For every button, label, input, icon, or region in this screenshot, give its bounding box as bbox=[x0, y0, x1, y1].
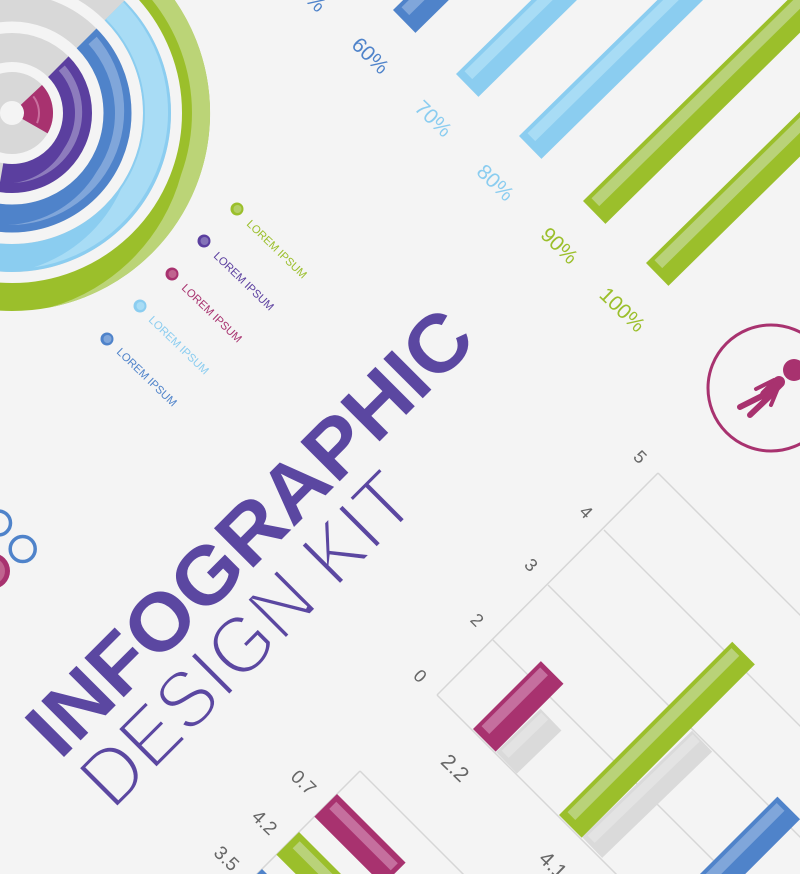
bar: 90% bbox=[583, 0, 800, 224]
green bar bbox=[559, 642, 755, 838]
ring 4: light blue segment bbox=[0, 0, 217, 318]
gray bar: lower bbox=[613, 827, 769, 874]
blue bar bbox=[636, 797, 800, 874]
axis labels: 5 bbox=[629, 446, 651, 468]
bar: 70% bbox=[456, 0, 692, 97]
ring 1: magenta segment bbox=[0, 75, 50, 151]
icon: person in circle bbox=[708, 325, 800, 451]
ring: blue upper bbox=[0, 511, 10, 535]
bar: 100% bbox=[646, 39, 800, 286]
bar: 60% bbox=[393, 0, 629, 33]
legend bbox=[100, 202, 309, 409]
green bar bbox=[276, 832, 377, 874]
value labels: 0.7 bbox=[286, 766, 320, 800]
heading: DESIGN KIT: DESIGN KIT bbox=[62, 454, 433, 825]
axis labels: 2 bbox=[466, 609, 488, 631]
ring: blue lower bbox=[10, 536, 35, 562]
dot: magenta bbox=[0, 553, 10, 589]
grid lines bbox=[437, 473, 800, 874]
axes bbox=[256, 771, 464, 874]
percent bar chart bbox=[284, 0, 800, 337]
magenta bar bbox=[473, 661, 564, 752]
legend item: green: LOREM IPSUM bbox=[244, 218, 309, 281]
blue bar bbox=[254, 869, 276, 874]
legend item: green bbox=[230, 202, 309, 281]
second bar chart bbox=[209, 766, 464, 874]
percent labels: 60% bbox=[347, 33, 393, 79]
ring 2: purple segment bbox=[0, 20, 105, 206]
percent labels bbox=[284, 0, 649, 337]
axis labels bbox=[409, 446, 651, 687]
gray bar: 2.2 bbox=[496, 709, 561, 774]
legend item: light blue: LOREM IPSUM bbox=[146, 314, 211, 377]
legend item: magenta bbox=[166, 268, 244, 345]
bar chart: axis grid and bars bbox=[409, 446, 800, 874]
radial chart bbox=[0, 0, 217, 318]
heading: INFOGRAPHIC: INFOGRAPHIC bbox=[9, 291, 491, 774]
legend item: blue: LOREM IPSUM bbox=[114, 346, 179, 409]
axis labels: 3 bbox=[520, 554, 542, 576]
percent labels: 70% bbox=[410, 96, 456, 142]
percent labels: 80% bbox=[472, 160, 518, 206]
legend item: purple bbox=[198, 234, 276, 313]
ring 5: green bbox=[0, 0, 210, 307]
legend item: purple: LOREM IPSUM bbox=[211, 250, 276, 313]
axis labels: 0 bbox=[409, 665, 431, 687]
title bbox=[9, 291, 491, 825]
value label 2.2: 2.2 bbox=[436, 750, 473, 787]
legend item: magenta: LOREM IPSUM bbox=[179, 282, 244, 345]
bar: 80% bbox=[519, 0, 770, 159]
percent labels: 90% bbox=[536, 223, 582, 269]
percent labels: 100% bbox=[595, 283, 649, 337]
axis labels: 4 bbox=[575, 501, 597, 523]
magenta bar bbox=[314, 794, 406, 874]
gray bar: 4.1 bbox=[582, 731, 712, 858]
legend item: blue bbox=[100, 332, 179, 409]
value labels bbox=[209, 766, 320, 874]
legend item: light blue bbox=[134, 300, 211, 377]
decorative circles bbox=[0, 511, 35, 589]
ring 3: blue segment bbox=[0, 0, 161, 262]
value labels: 4.2 bbox=[247, 806, 281, 840]
